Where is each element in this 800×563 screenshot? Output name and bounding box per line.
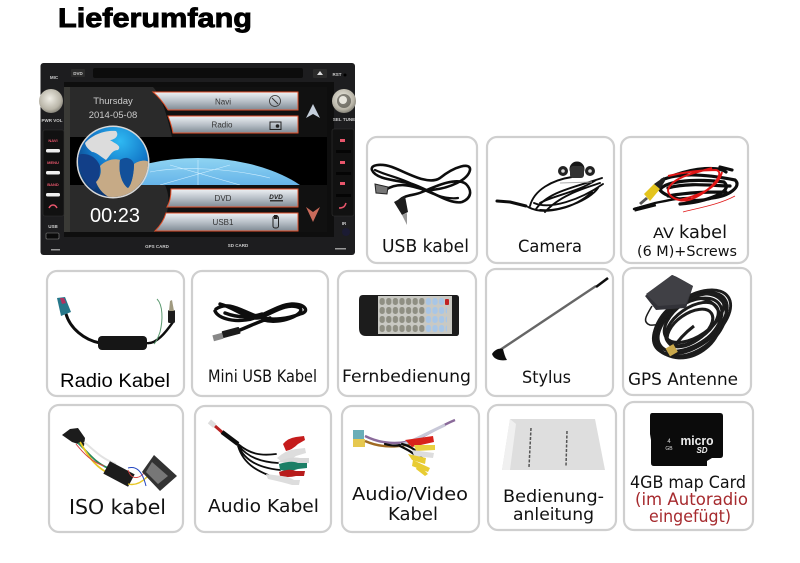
icon: audio video cable bbox=[353, 420, 455, 476]
label: (6 M)+Screws bbox=[637, 244, 737, 260]
icon: radio cable bbox=[57, 297, 175, 350]
menu buttons: Radio bbox=[212, 120, 233, 130]
panel: Radio Kabel bbox=[47, 271, 184, 396]
label: GPS Antenne bbox=[628, 370, 738, 390]
panel: Audio/Video Kabel bbox=[342, 406, 479, 532]
clock and date: Thursday bbox=[93, 96, 133, 107]
knobs bbox=[39, 89, 356, 123]
label bbox=[352, 485, 468, 525]
icon: usb cable bbox=[372, 165, 470, 225]
label: anleitung bbox=[513, 505, 594, 525]
globe bbox=[76, 126, 150, 198]
label: Radio Kabel bbox=[60, 371, 170, 392]
menu buttons: DVD bbox=[215, 194, 232, 203]
label: Fernbedienung bbox=[342, 367, 471, 387]
menu buttons: DVD bbox=[269, 194, 283, 201]
title: Lieferumfang bbox=[58, 3, 252, 33]
clock and date: 2014-05-08 bbox=[89, 110, 137, 121]
icon: audio cable bbox=[208, 420, 309, 485]
label: Mini USB Kabel bbox=[208, 367, 317, 386]
side buttons: BAND bbox=[47, 182, 59, 187]
screen bbox=[70, 87, 327, 232]
panel: Fernbedienung bbox=[338, 271, 476, 396]
arrows: page up and down bbox=[306, 104, 320, 222]
label: ISO kabel bbox=[69, 495, 166, 519]
panel: Stylus bbox=[486, 269, 613, 396]
side buttons bbox=[43, 129, 354, 216]
head unit: car radio: RST bbox=[332, 72, 342, 77]
label: (im Autoradio bbox=[635, 490, 748, 510]
label: eingefügt) bbox=[649, 507, 731, 527]
clock and date bbox=[89, 96, 140, 227]
label: Stylus bbox=[522, 368, 571, 387]
label: 4GB map Card bbox=[630, 473, 746, 493]
side buttons: NAVI bbox=[48, 138, 58, 143]
icon: GPS antenna bbox=[642, 275, 742, 370]
menu buttons: USB1 bbox=[213, 218, 234, 227]
label: Kabel bbox=[388, 505, 438, 525]
label: Audio/Video bbox=[352, 485, 468, 505]
panel: AV kabel bbox=[621, 137, 748, 263]
label bbox=[503, 487, 604, 525]
icon: mini usb cable bbox=[212, 304, 306, 341]
label: Camera bbox=[518, 237, 582, 256]
icon: AV cable bbox=[634, 167, 737, 212]
icon: stylus pen bbox=[492, 278, 608, 360]
label: Audio Kabel bbox=[208, 496, 319, 517]
icon: micro SD card: micro bbox=[680, 433, 714, 448]
panel: 4GB map Card bbox=[624, 402, 753, 530]
clock and date: 00:23 bbox=[90, 205, 140, 227]
label: kabel bbox=[679, 222, 727, 243]
label bbox=[630, 473, 748, 527]
label: AV bbox=[653, 226, 674, 242]
label bbox=[637, 222, 737, 260]
icon: micro SD card bbox=[650, 413, 723, 466]
panel: Audio Kabel bbox=[195, 406, 331, 532]
head unit: car radio bbox=[39, 63, 356, 255]
knobs: PWR VOL bbox=[42, 118, 63, 123]
knobs: SEL TUNE bbox=[333, 117, 355, 122]
panel: Camera bbox=[487, 137, 614, 263]
menu buttons bbox=[153, 92, 298, 231]
icon: micro SD card: GB bbox=[665, 446, 673, 452]
usb port and sensor: USB bbox=[48, 224, 58, 229]
icon: remote control bbox=[359, 295, 459, 336]
panel: USB kabel bbox=[367, 137, 477, 263]
icon: micro SD card: 4 bbox=[667, 439, 671, 445]
panel: Bedienungsanleitung bbox=[488, 405, 616, 530]
panel: Mini USB Kabel bbox=[192, 271, 328, 396]
panel: ISO kabel bbox=[49, 405, 183, 532]
head unit: car radio: DVD bbox=[73, 71, 83, 76]
usb port and sensor: IR bbox=[342, 221, 347, 226]
usb port and sensor: GPS CARD bbox=[145, 244, 170, 249]
usb port and sensor bbox=[46, 221, 350, 250]
label: USB kabel bbox=[382, 236, 469, 257]
icon: ISO cable bbox=[62, 428, 177, 491]
label: Bedienung- bbox=[503, 487, 604, 507]
icon: camera bbox=[497, 162, 603, 212]
usb port and sensor: SD CARD bbox=[228, 243, 249, 248]
head unit: car radio: MIC bbox=[50, 75, 59, 80]
panel: GPS Antenne bbox=[623, 268, 751, 395]
icon: manual booklet bbox=[502, 419, 605, 470]
icon: micro SD card: SD bbox=[696, 446, 708, 455]
side buttons: MENU bbox=[47, 160, 59, 165]
menu buttons: Navi bbox=[215, 98, 231, 106]
